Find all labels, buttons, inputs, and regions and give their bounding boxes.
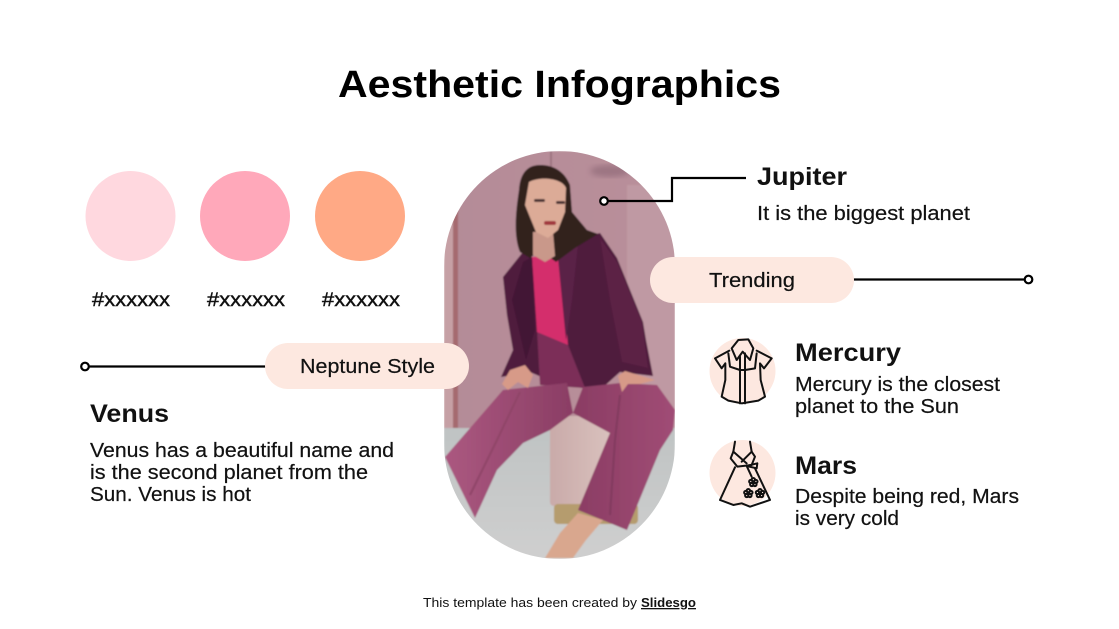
text block: Mars: is very cold: [795, 508, 899, 530]
title: Aesthetic Infographics: [338, 64, 781, 106]
photo: woman in plum suit: [444, 151, 675, 559]
pill: Neptune Style: Neptune Style: [300, 356, 435, 378]
stool: [550, 416, 610, 506]
sweater: [532, 255, 568, 345]
swatch: pink: [200, 171, 290, 311]
hair: [516, 165, 598, 262]
text block: Venus: is the second planet from the: [90, 462, 368, 484]
swatch: peach: [315, 171, 405, 311]
pill: Neptune Style: [81, 343, 469, 389]
colour palette: [86, 171, 405, 311]
swatch: pink: #xxxxxx: [207, 290, 286, 311]
text block: Mercury: Mercury: [795, 339, 901, 367]
foot: [545, 513, 603, 558]
icon: dress: [710, 440, 776, 507]
jacket back and arms: [501, 233, 653, 390]
text block: Venus: [90, 400, 394, 506]
text block: Mercury: Mercury is the closest: [795, 374, 1000, 396]
connector: Jupiter: [600, 178, 746, 205]
swatch: light pink: [86, 171, 176, 311]
footer credit: This template has been created by: [423, 595, 638, 610]
right leg: [573, 383, 675, 530]
neck: [533, 232, 555, 262]
swatch: light pink: #xxxxxx: [92, 290, 171, 311]
face: [525, 179, 566, 238]
text block: Mars: Mars: [795, 452, 857, 480]
pill: Trending: [650, 257, 1032, 303]
label: Jupiter: It is the biggest planet: [757, 203, 970, 225]
icon: blouse: [710, 338, 776, 404]
pill: Trending: Trending: [709, 270, 795, 292]
text block: Mars: [795, 452, 1019, 530]
footer credit: Slidesgo: [641, 595, 696, 610]
label: Jupiter: [757, 163, 970, 225]
text block: Venus: Venus: [90, 400, 169, 428]
hands: [502, 365, 533, 390]
text block: Mercury: planet to the Sun: [795, 396, 959, 418]
swatch: peach: #xxxxxx: [322, 290, 401, 311]
text block: Venus: Sun. Venus is hot: [90, 484, 251, 506]
text block: Mercury: [795, 339, 1000, 418]
text block: Venus: Venus has a beautiful name and: [90, 440, 394, 462]
lapels: [512, 257, 535, 360]
left leg: [445, 383, 573, 518]
text block: Mars: Despite being red, Mars: [795, 486, 1019, 508]
blouse under jacket: [537, 330, 585, 388]
label: Jupiter: Jupiter: [757, 163, 847, 191]
